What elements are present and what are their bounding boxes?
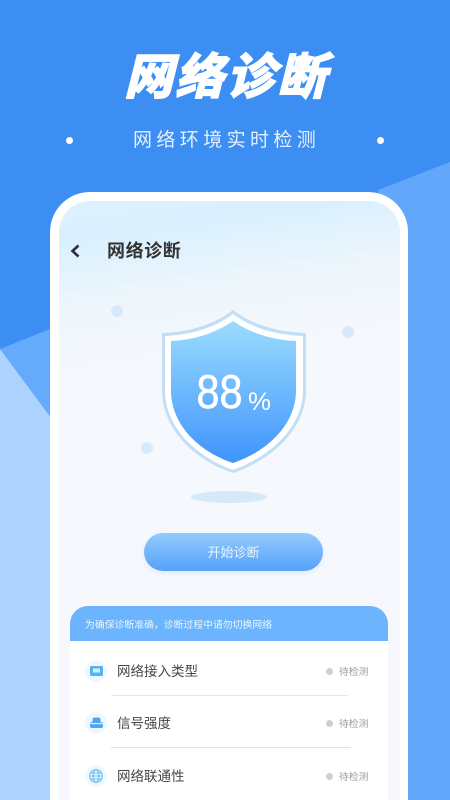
back arrow icon — [70, 244, 80, 258]
percent sign: % — [248, 388, 271, 416]
panel: diagnostics list — [70, 606, 388, 800]
phone mockup — [50, 192, 408, 800]
icon: network type — [85, 660, 107, 682]
shadow ellipse — [191, 491, 267, 503]
shield white ring — [165, 314, 303, 470]
status dot 1 — [326, 668, 333, 674]
label: network type: 网络接入类型 — [117, 664, 198, 679]
start button — [144, 533, 323, 571]
status 3: 待检测 — [339, 772, 368, 783]
divider 1 — [111, 695, 348, 696]
status 2: 待检测 — [339, 719, 368, 730]
icon: signal strength — [85, 712, 107, 734]
panel header — [70, 606, 388, 641]
subtitle: 网络环境实时检测 — [133, 130, 320, 151]
divider 2 — [111, 747, 351, 748]
floating dots — [111, 305, 354, 454]
status dot 3 — [326, 772, 333, 780]
decorative dot left — [66, 136, 73, 144]
shield inner — [171, 321, 296, 463]
shield outer ring — [162, 310, 306, 473]
title: 网络诊断 — [124, 51, 328, 105]
screen heading: 网络诊断 — [107, 241, 181, 261]
shield gauge — [162, 310, 306, 503]
panel header: 为确保诊断准确，诊断过程中请勿切换网络 — [85, 620, 272, 631]
status 1: 待检测 — [339, 667, 368, 678]
decorative dot right — [377, 136, 384, 144]
label: signal strength: 信号强度 — [117, 716, 171, 731]
start button: 开始诊断 — [207, 545, 260, 560]
status dot 2 — [326, 720, 333, 727]
icon: connectivity — [85, 765, 107, 787]
value: 88 — [196, 365, 242, 418]
label: connectivity: 网络联通性 — [117, 769, 184, 784]
phone screen background — [59, 201, 400, 800]
